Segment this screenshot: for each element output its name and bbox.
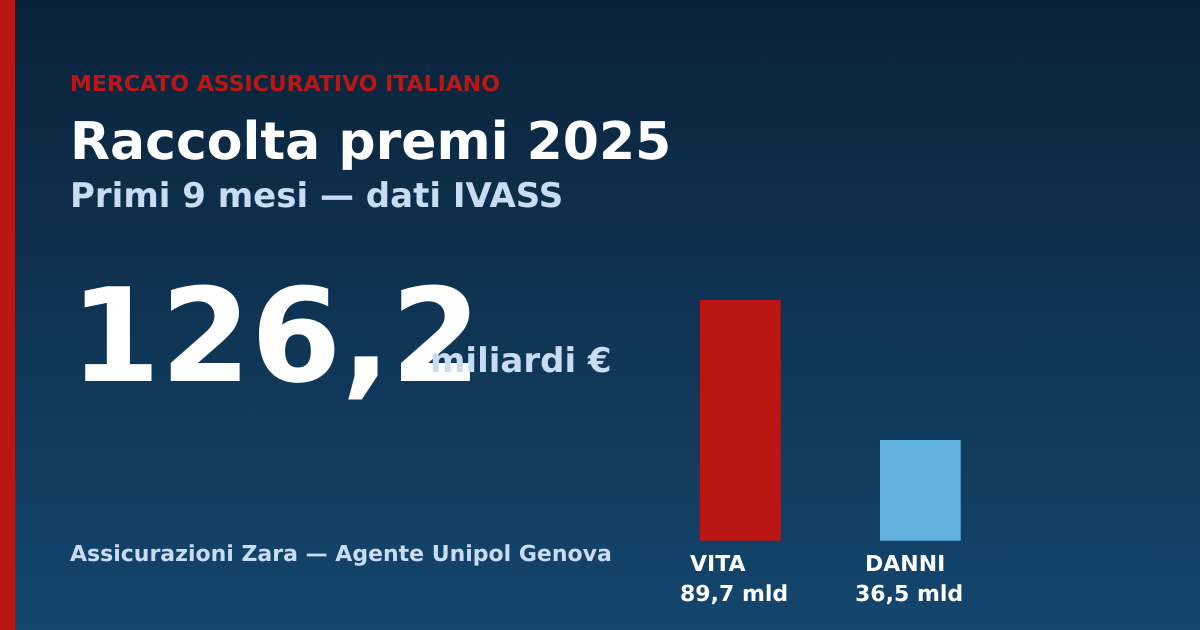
- value: danni: 36,5 mld: [855, 582, 963, 607]
- footer credit: Assicurazioni Zara — Agente Unipol Genova: [70, 542, 612, 567]
- eyebrow heading: MERCATO ASSICURATIVO ITALIANO: [70, 72, 500, 97]
- bar: danni: [880, 440, 961, 541]
- big number: 126,2: [70, 260, 481, 412]
- label: danni: DANNI: [865, 552, 945, 577]
- subtitle: Primi 9 mesi — dati IVASS: [70, 176, 563, 216]
- unit label: miliardi €: [430, 341, 612, 381]
- label: vita: VITA: [690, 552, 746, 577]
- bar: vita: [700, 300, 781, 541]
- value: vita: 89,7 mld: [680, 582, 788, 607]
- left accent bar: [0, 0, 15, 630]
- title: Raccolta premi 2025: [70, 112, 671, 172]
- bar chart: [680, 300, 963, 607]
